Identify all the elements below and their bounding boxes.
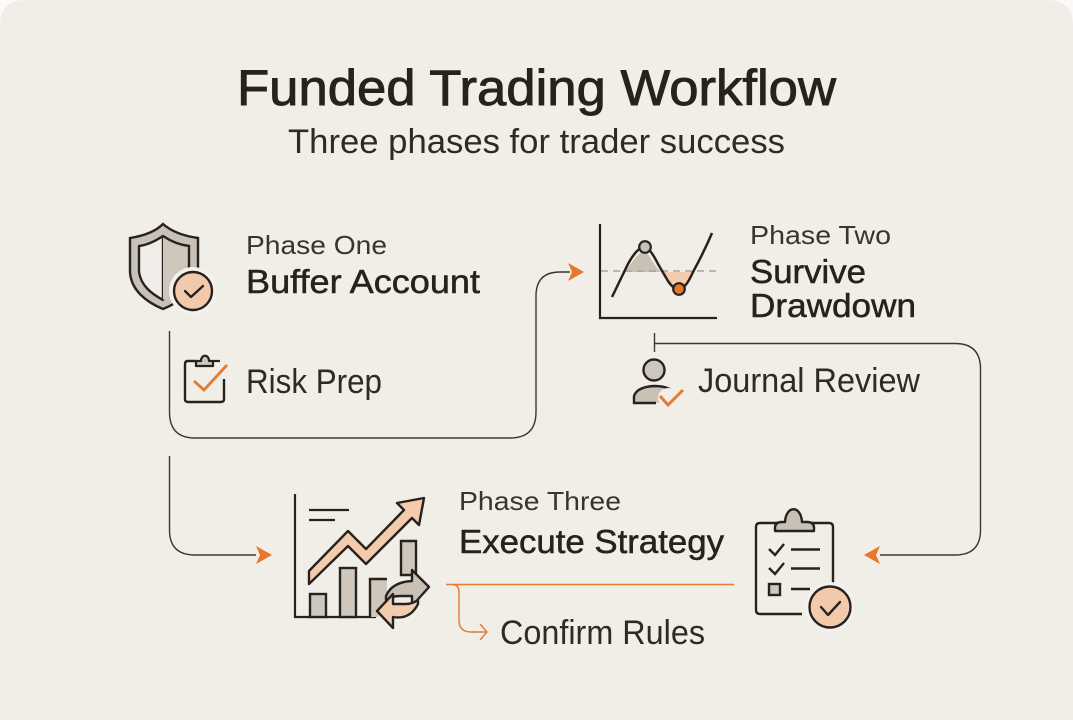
- phase two heading: Survive: [750, 253, 866, 290]
- icon: execute strategy chart: [295, 494, 429, 628]
- icon: drawdown chart: [600, 224, 717, 318]
- risk prep label: Risk Prep: [246, 363, 382, 401]
- confirm rules label: Confirm Rules: [500, 614, 705, 652]
- icon: shield with check: [130, 224, 217, 315]
- connector: to phase three: [170, 456, 256, 555]
- journal review label: Journal Review: [698, 362, 920, 400]
- title: Funded Trading Workflow: [237, 60, 837, 116]
- icon: journal review person: [634, 360, 683, 408]
- connector: phase two to checklist: [654, 333, 980, 555]
- connector: phase one to phase two: [170, 272, 570, 438]
- divider connector: orange line to confirm rules: [446, 584, 734, 640]
- phase three label: Phase Three: [459, 486, 621, 516]
- subtitle: Three phases for trader success: [288, 123, 785, 161]
- icon: checklist clipboard: [756, 509, 855, 632]
- phase one label: Phase One: [246, 230, 387, 260]
- phase two heading: Drawdown: [750, 287, 916, 324]
- arrow head: to phase three: [256, 546, 272, 564]
- phase two heading: [750, 253, 916, 324]
- arrow head: to phase two: [568, 263, 584, 281]
- phase one heading: Buffer Account: [246, 263, 480, 300]
- icon: risk prep clipboard: [185, 356, 227, 402]
- phase three heading: Execute Strategy: [459, 523, 725, 560]
- arrow head: to checklist: [864, 546, 880, 564]
- phase two label: Phase Two: [750, 220, 891, 250]
